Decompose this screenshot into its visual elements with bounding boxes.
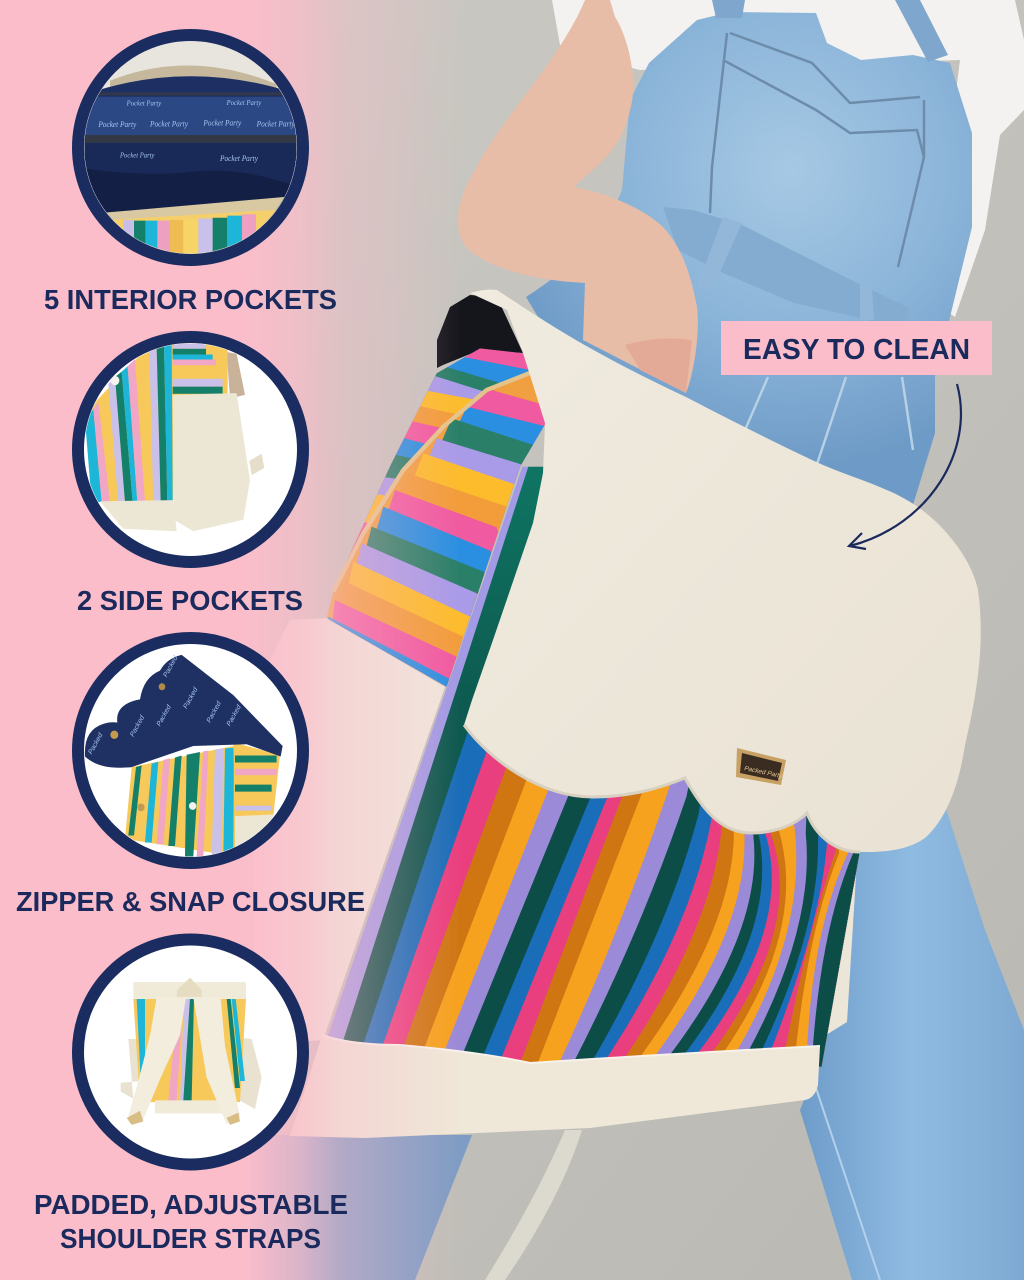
circle photo: interior: Pocket Party — [219, 154, 259, 163]
feature: 5 interior pockets — [44, 35, 337, 315]
callout text: EASY TO CLEAN — [743, 334, 970, 366]
dark flap lining — [437, 295, 523, 368]
feature: zipper and snap closure — [16, 638, 365, 917]
circle photo: open flap: Packed — [156, 704, 173, 728]
overalls bib — [526, 12, 972, 505]
arrow to flap — [849, 384, 961, 549]
feature: 2 side pockets — [77, 337, 303, 616]
jeans left leg — [250, 1135, 472, 1280]
circle photo: interior: Pocket Party — [226, 100, 262, 107]
feature: padded adjustable shoulder straps — [34, 940, 348, 1254]
caption: 2 SIDE POCKETS — [77, 585, 303, 616]
band seam — [322, 1035, 820, 1063]
circle photo: interior: Pocket Party — [256, 119, 295, 128]
bib pocket stitching — [710, 33, 924, 467]
overalls straps — [712, 0, 948, 62]
white shirt — [552, 0, 1024, 317]
jeans right leg — [800, 780, 1024, 1280]
bottom cream band — [290, 1035, 820, 1138]
gold logo plate: Packed Party — [744, 765, 784, 780]
circle photo: open flap: Packed — [129, 714, 146, 738]
back strap — [485, 1130, 582, 1280]
pink fade over the left side — [0, 0, 470, 1280]
jeans seam — [815, 1085, 880, 1280]
caption: ZIPPER & SNAP CLOSURE — [16, 886, 365, 917]
arm and hand — [458, 0, 698, 393]
circle photo: interior: Pocket Party — [149, 119, 189, 128]
gold logo plate — [736, 748, 786, 785]
circle photo: interior: Pocket Party — [119, 152, 155, 160]
circle photo: interior: Pocket Party — [126, 101, 162, 108]
circle photo: side view — [78, 337, 303, 562]
hand shading — [625, 338, 692, 393]
callout label — [721, 321, 992, 375]
circle photo: open flap: Packed — [182, 686, 200, 710]
lower rainbow panel — [328, 466, 860, 1067]
cream flap with scalloped edge — [464, 290, 981, 852]
backpack — [250, 290, 981, 1138]
caption: 5 INTERIOR POCKETS — [44, 284, 337, 315]
right gusset — [818, 860, 857, 1040]
person wearing denim overalls — [250, 0, 1024, 1280]
circle photo: open flap — [78, 638, 303, 863]
circle photo: interior — [78, 35, 303, 263]
zippered striped pocket — [326, 348, 545, 687]
caption: PADDED, ADJUSTABLE — [34, 1189, 348, 1220]
belt loops — [697, 217, 874, 320]
circle photo: back view — [78, 940, 303, 1164]
circle photo: open flap: Packed — [87, 732, 105, 756]
circle photo: open flap: Packed — [226, 704, 243, 728]
flap stitched edge shading — [464, 725, 860, 852]
caption: SHOULDER STRAPS — [60, 1223, 321, 1254]
circle photo: interior: Pocket Party — [97, 120, 137, 129]
circle photo: open flap: Packed — [206, 700, 223, 724]
circle photo: open flap: Packed — [162, 655, 180, 679]
overalls waistband — [663, 207, 909, 330]
left cream pocket — [250, 618, 445, 1045]
circle photo: interior: Pocket Party — [202, 118, 242, 128]
gold zipper — [333, 372, 533, 592]
callout: easy to clean — [721, 321, 992, 375]
